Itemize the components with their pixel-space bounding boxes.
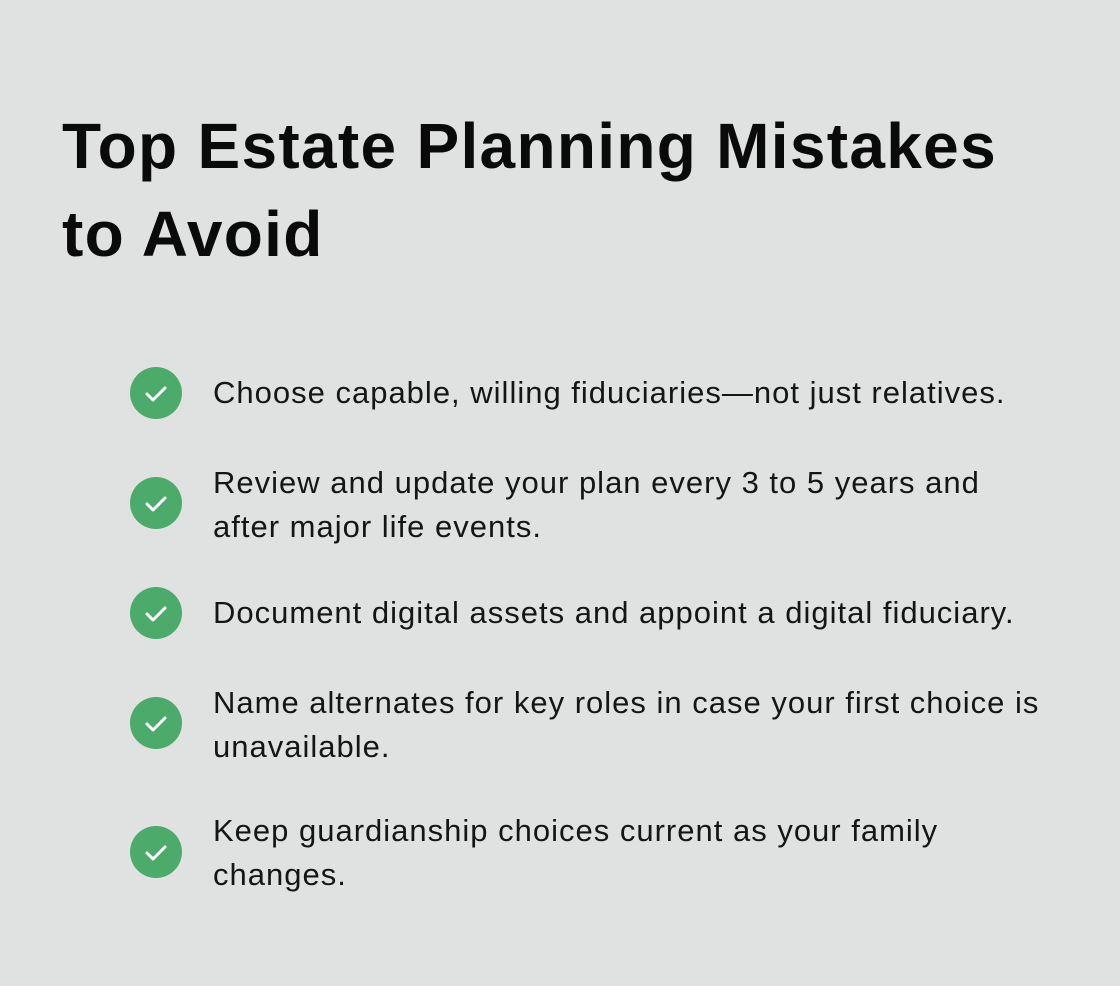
text 4: unavailable. [213, 729, 390, 764]
text 2 [213, 465, 980, 544]
icon: check 5 [130, 826, 182, 878]
text 5: changes. [213, 857, 347, 892]
item 3 [130, 587, 1015, 639]
icon: check 3 [130, 587, 182, 639]
icon: check 4 [130, 697, 182, 749]
item 4 [130, 685, 1039, 764]
title [62, 110, 997, 270]
text 5: Keep guardianship choices current as your family [213, 813, 938, 848]
item 2 [130, 465, 980, 544]
title: Top Estate Planning Mistakes [62, 110, 997, 182]
text 4: Name alternates for key roles in case your first choice is [213, 685, 1039, 720]
text 3: Document digital assets and appoint a digital fiduciary. [213, 595, 1015, 630]
item 5 [130, 813, 938, 892]
item 1 [130, 367, 1005, 419]
title: to Avoid [62, 198, 324, 270]
icon: check 1 [130, 367, 182, 419]
text 5 [213, 813, 938, 892]
text 1: Choose capable, willing fiduciaries—not just relatives. [213, 375, 1005, 410]
text 2: after major life events. [213, 509, 542, 544]
text 4 [213, 685, 1039, 764]
icon: check 2 [130, 477, 182, 529]
text 2: Review and update your plan every 3 to 5 years and [213, 465, 980, 500]
